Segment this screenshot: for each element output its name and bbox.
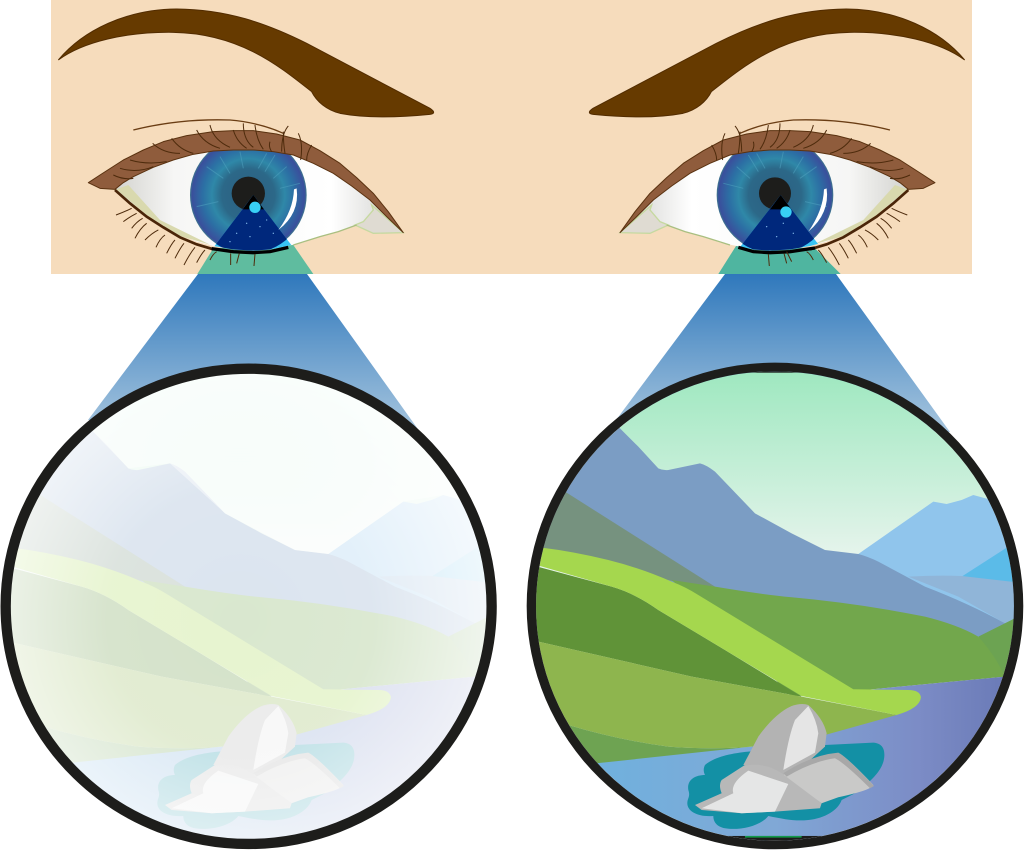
stars	[766, 223, 794, 237]
lower lid line	[810, 190, 908, 249]
lashes	[113, 123, 312, 266]
navy beam on iris	[216, 195, 287, 251]
pupil	[759, 177, 791, 209]
green beam below lid	[197, 245, 313, 274]
blurred scene	[0, 360, 495, 850]
left lens: clouded landscape	[0, 360, 495, 850]
lashes	[712, 123, 910, 266]
inner corner	[355, 205, 403, 233]
pupil reflection	[249, 202, 261, 213]
left eye	[88, 120, 403, 274]
iris rays	[723, 152, 827, 207]
navy beam on iris	[742, 195, 814, 251]
highlight	[278, 188, 297, 230]
left eyebrow	[58, 9, 434, 117]
crease line	[740, 120, 890, 133]
iris rays	[197, 152, 300, 207]
sclera	[620, 150, 908, 251]
beam apex on pupil	[770, 195, 791, 209]
beam below left eye	[88, 274, 420, 432]
skin panel	[51, 0, 972, 274]
sharp scene	[525, 360, 1024, 850]
upper lid	[620, 131, 935, 233]
lower lid rim	[667, 225, 730, 245]
lens rim	[6, 369, 492, 844]
lower lid rim	[293, 225, 357, 245]
beam apex on pupil	[243, 195, 264, 209]
olive outer corner	[813, 185, 907, 245]
crease line	[133, 120, 283, 133]
right eye	[620, 120, 935, 274]
inner corner	[620, 205, 668, 233]
cyan beam on sclera	[740, 195, 818, 250]
sclera	[115, 150, 403, 251]
iris	[190, 150, 307, 250]
stars	[229, 219, 274, 242]
pupil reflection	[780, 206, 792, 218]
beam below right eye	[616, 274, 950, 432]
green beam below lid	[718, 245, 841, 274]
highlight	[808, 188, 827, 232]
iris	[716, 150, 834, 250]
right lens: clear landscape	[525, 360, 1024, 850]
olive outer corner	[116, 185, 210, 245]
lens rim	[527, 363, 1023, 849]
right eyebrow	[589, 9, 965, 117]
cyan beam on sclera	[214, 195, 292, 250]
lower lid line	[115, 190, 213, 249]
pupil	[232, 177, 265, 210]
upper lid	[88, 131, 403, 233]
